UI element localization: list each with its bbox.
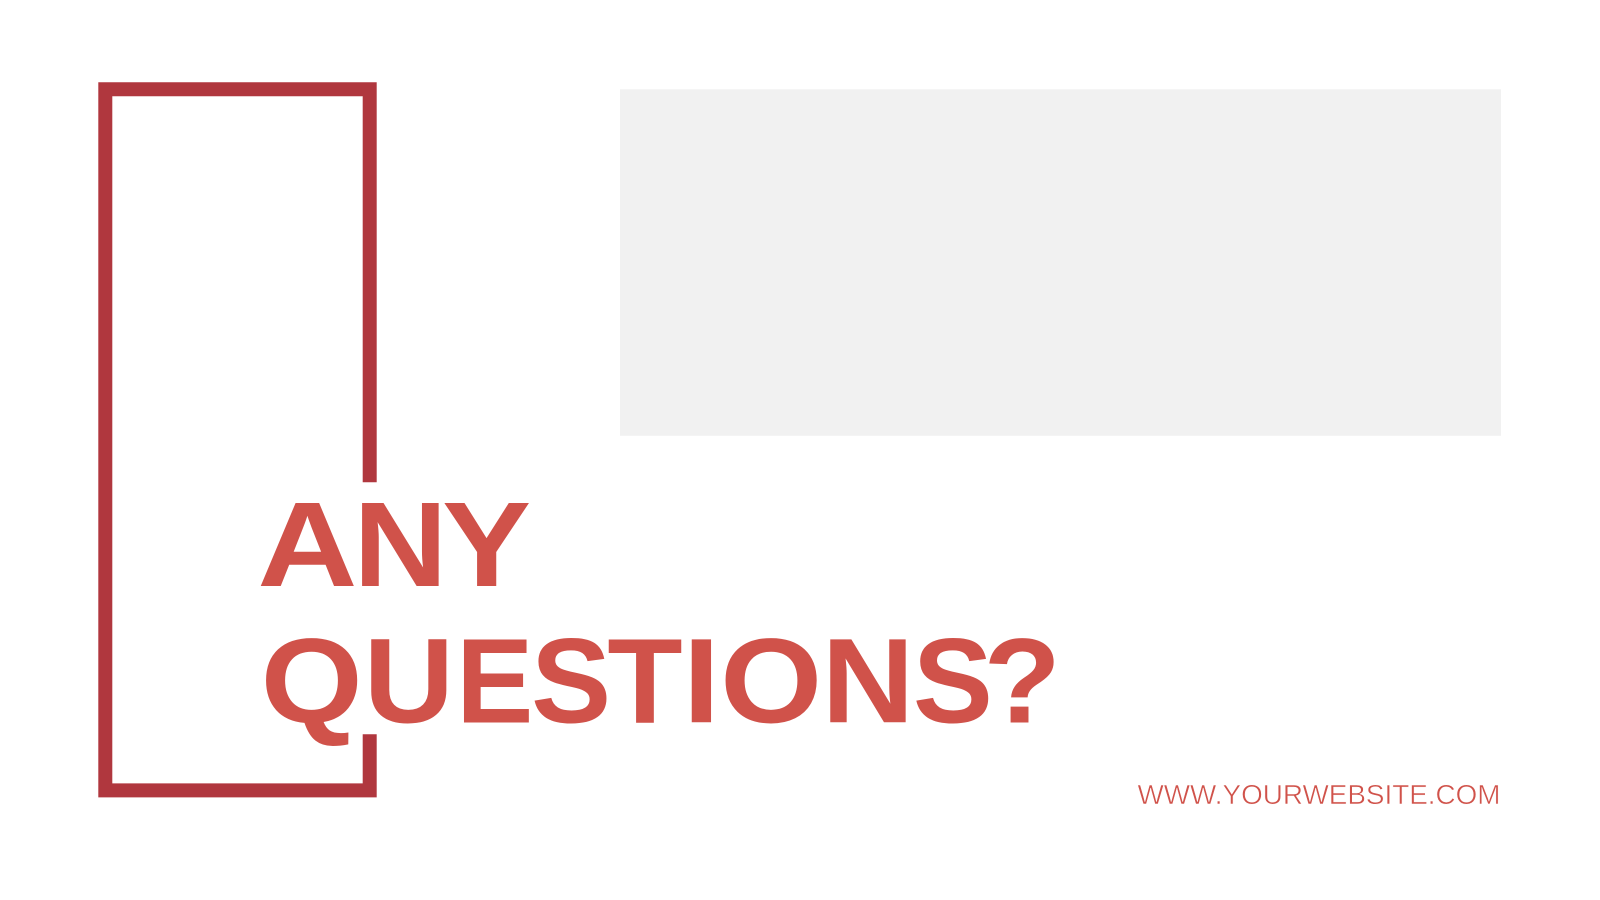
image placeholder panel (620, 89, 1501, 436)
title line: QUESTIONS?: N (822, 613, 914, 748)
title line: QUESTIONS?: ? (984, 613, 1061, 748)
website address: WWW.YOURWEBSITE.COM (1138, 779, 1500, 810)
title line: QUESTIONS?: T (607, 613, 683, 748)
title line: ANY: A (257, 477, 358, 612)
title line: ANY: Y (442, 477, 531, 612)
title line: QUESTIONS?: Q (261, 613, 363, 748)
title line: QUESTIONS?: S (913, 613, 993, 748)
title line: ANY: N (353, 477, 447, 612)
bracket frame (105, 89, 370, 790)
title line: QUESTIONS?: U (364, 613, 454, 748)
title line: QUESTIONS?: S (531, 613, 611, 748)
title line: QUESTIONS?: O (720, 613, 822, 748)
title (257, 477, 1061, 748)
title line: QUESTIONS?: E (456, 613, 533, 748)
title line: QUESTIONS?: I (683, 613, 720, 748)
